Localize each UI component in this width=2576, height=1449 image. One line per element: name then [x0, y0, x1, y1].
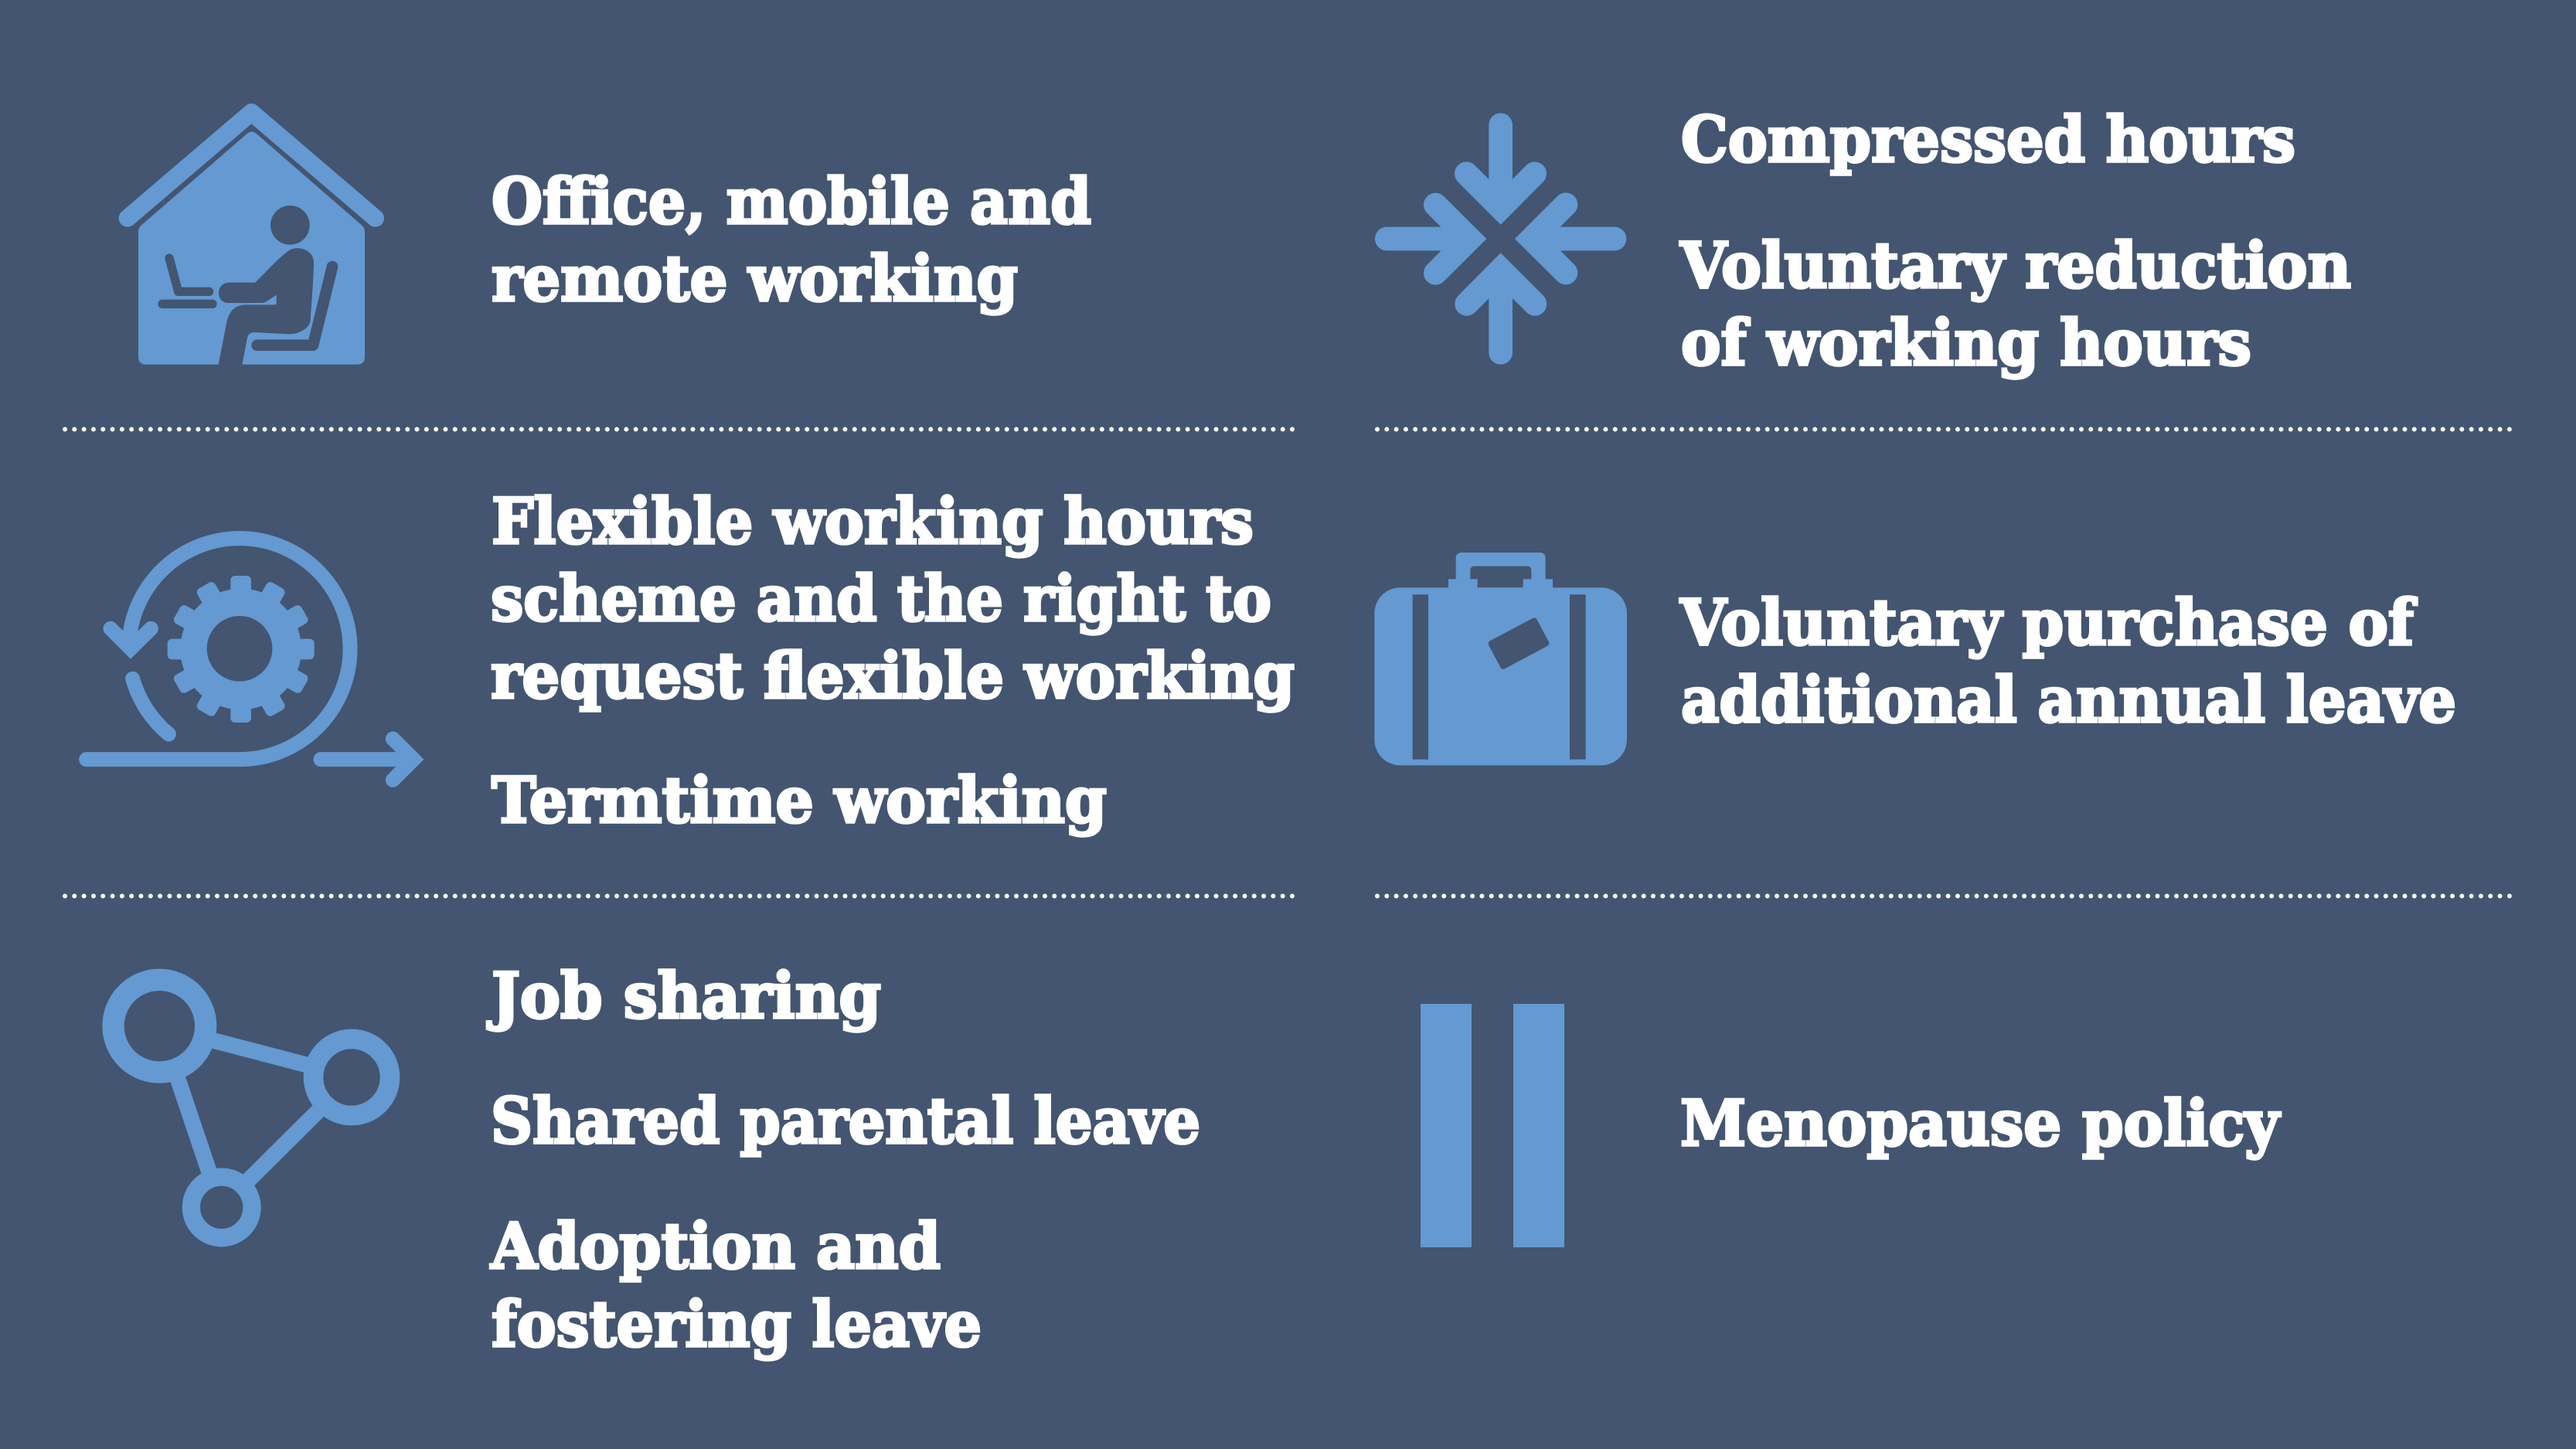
text: compressed hours and voluntary reduction: [1679, 104, 2351, 380]
text: flexible working hours and termtime working: Termtime working: [492, 764, 1107, 838]
icon: gear with cycle arrow: [87, 539, 413, 780]
text: voluntary purchase of additional annual leave: [1679, 587, 2456, 737]
text: job sharing, shared parental leave, adoption and fostering leave: Adoption and: [490, 1210, 941, 1284]
text: job sharing, shared parental leave, adoption and fostering leave: Shared parental leave: [491, 1085, 1200, 1158]
icon: person working at laptop in a house: [128, 112, 376, 365]
text: compressed hours and voluntary reduction: Voluntary reduction: [1679, 230, 2351, 303]
text: flexible working hours and termtime working: request flexible working: [491, 640, 1295, 713]
text: flexible working hours and termtime working: scheme and the right to: [491, 563, 1271, 636]
text: voluntary purchase of additional annual leave: additional annual leave: [1681, 664, 2456, 737]
text: flexible working hours and termtime working: Flexible working hours: [492, 485, 1254, 559]
text: flexible working hours and termtime working: [491, 485, 1295, 838]
text: voluntary purchase of additional annual leave: Voluntary purchase of: [1679, 587, 2418, 660]
text: compressed hours and voluntary reduction: of working hours: [1681, 307, 2251, 380]
text: compressed hours and voluntary reduction: Compressed hours: [1681, 104, 2295, 177]
text: job sharing, shared parental leave, adoption and fostering leave: [487, 960, 1200, 1362]
text: office, mobile and remote working: Office, mobile and: [492, 165, 1091, 239]
icon: pause bars: [1421, 1004, 1564, 1247]
text: job sharing, shared parental leave, adoption and fostering leave: fostering leave: [492, 1288, 982, 1362]
text: menopause policy: Menopause policy: [1680, 1087, 2281, 1161]
text: office, mobile and remote working: remote working: [492, 243, 1018, 316]
icon: suitcase: [1374, 553, 1627, 765]
text: job sharing, shared parental leave, adoption and fostering leave: Job sharing: [487, 960, 881, 1033]
icon: inward arrows: [1387, 125, 1615, 352]
icon: connected network nodes: [113, 980, 390, 1238]
text: office, mobile and remote working: [492, 165, 1091, 316]
